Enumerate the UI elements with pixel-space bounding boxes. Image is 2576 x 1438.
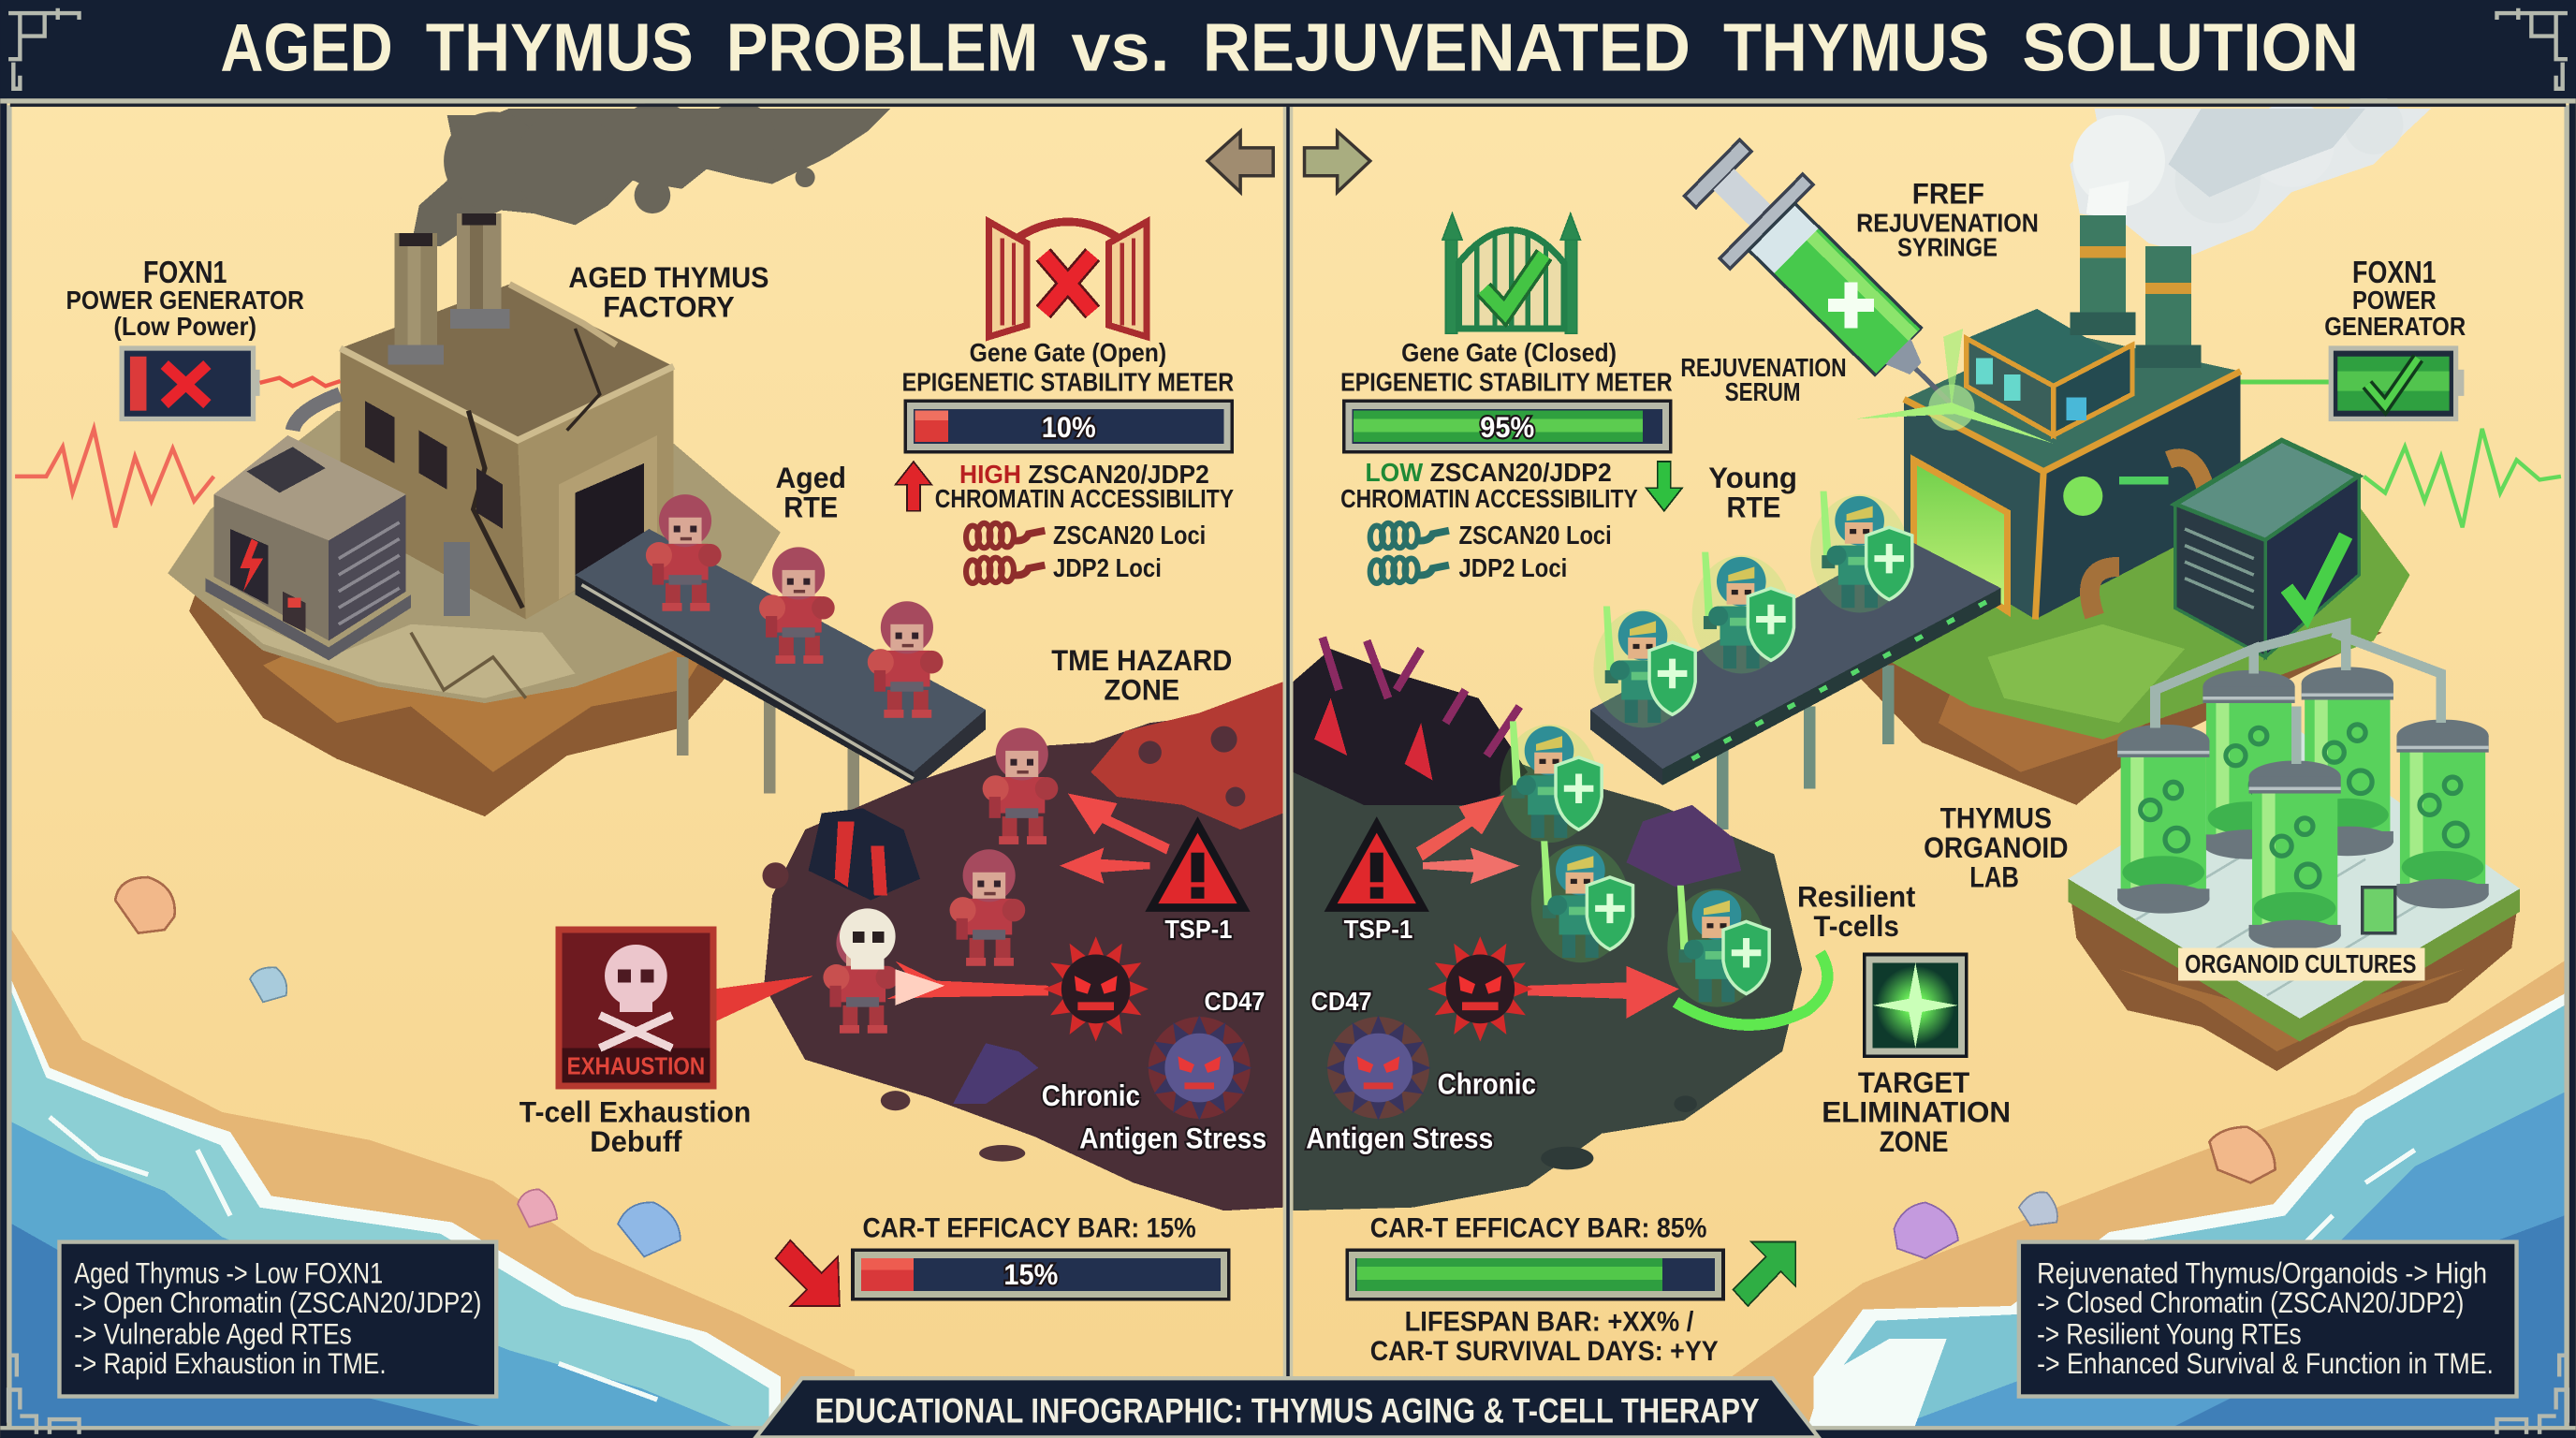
label: loci left — [1053, 521, 1206, 582]
label: gene gate and meter title left: Gene Gate (Open) — [970, 338, 1166, 367]
centre divider — [1283, 107, 1293, 1380]
label: chromatin right: LOW ZSCAN20/JDP2 — [1365, 458, 1612, 487]
label: lifespan and survival: LIFESPAN BAR: +XX% / — [1405, 1306, 1693, 1337]
label: FOXN1 right: POWER — [2352, 286, 2437, 315]
labels: right panel — [1306, 177, 2466, 1367]
summary box right: -> Resilient Young RTEs — [2037, 1316, 2302, 1350]
label: target elimination zone: ZONE — [1880, 1124, 1948, 1158]
TSP-1 warning left — [1145, 816, 1251, 912]
label: target elimination zone: TARGET — [1858, 1065, 1969, 1099]
label: FOXN1 right: GENERATOR — [2324, 312, 2466, 341]
epigenetic meter right — [1344, 401, 1671, 452]
summary box left: -> Open Chromatin (ZSCAN20/JDP2) — [74, 1285, 481, 1319]
right conveyor — [1590, 539, 2001, 829]
title banner — [0, 0, 2576, 107]
organoid lab platform — [2068, 731, 2520, 1071]
label: CD47 left: CD47 — [1205, 987, 1265, 1016]
label: FREF syringe: FREF — [1912, 177, 1984, 211]
label: chromatin left — [935, 460, 1234, 513]
epigenetic meter left: 10% — [1042, 410, 1096, 444]
label: lifespan and survival — [1370, 1306, 1719, 1367]
label: loci left: JDP2 Loci — [1053, 553, 1162, 582]
label: gene gate and meter title left: EPIGENETIC STABILITY METER — [902, 368, 1234, 397]
steam cloud — [2070, 95, 2431, 255]
direction arrow right — [1305, 131, 1370, 192]
title — [220, 10, 2359, 85]
label: FREF syringe: REJUVENATION — [1856, 208, 2039, 237]
resilient aura ring — [1676, 953, 1827, 1025]
target elimination icon — [1865, 954, 1967, 1056]
label: CD47 right: CD47 — [1311, 987, 1371, 1016]
label: young RTE: Young — [1708, 461, 1797, 494]
epigenetic meter right: 95% — [1480, 410, 1534, 444]
panel: problem side (aged thymus) — [12, 102, 1283, 1430]
organoid cultures label: ORGANOID CULTURES — [2185, 949, 2416, 978]
label: chronic antigen stress left: Antigen Stress — [1079, 1122, 1266, 1155]
hazard zone left — [762, 682, 1283, 1211]
label: rejuvenation serum — [1680, 353, 1847, 406]
rejuvenated island — [1840, 492, 2409, 805]
aged factory island — [168, 411, 781, 816]
label: loci right: JDP2 Loci — [1458, 553, 1567, 582]
chimneys — [388, 213, 509, 365]
labels: left panel — [66, 256, 1266, 1243]
right ECG wave — [2364, 429, 2561, 527]
summary box right: -> Closed Chromatin (ZSCAN20/JDP2) — [2037, 1285, 2464, 1319]
gene gate closed — [1442, 213, 1580, 333]
label: loci right: ZSCAN20 Loci — [1458, 521, 1612, 550]
hazard zone right — [1293, 638, 1802, 1211]
label: TME hazard zone: TME HAZARD — [1051, 643, 1232, 677]
label: loci left: ZSCAN20 Loci — [1053, 521, 1206, 550]
label: FREF syringe — [1856, 177, 2039, 262]
panel: solution side (rejuvenated thymus) — [1293, 95, 2564, 1430]
label: gene gate and meter title left — [902, 338, 1234, 397]
label: chronic antigen stress right: Chronic — [1438, 1067, 1536, 1101]
rope loci left — [966, 523, 1045, 583]
injection glow — [1856, 329, 2054, 444]
hazard beams left — [887, 794, 1170, 1005]
summary box left: -> Vulnerable Aged RTEs — [74, 1316, 352, 1350]
direction arrow left — [1208, 131, 1273, 192]
high chromatin arrow — [896, 462, 931, 511]
label: chronic antigen stress right — [1306, 1067, 1536, 1155]
label: young RTE — [1708, 461, 1797, 524]
label: gene gate and meter title right — [1340, 338, 1673, 397]
label: thymus organoid lab: LAB — [1969, 860, 2019, 894]
rejuvenated factory — [1904, 215, 2241, 620]
CAR-T bar left: 15% — [1003, 1257, 1058, 1291]
label: exhaustion debuff — [520, 1094, 751, 1158]
down arrow red — [776, 1240, 840, 1306]
left ECG wave — [15, 429, 213, 527]
rope loci right — [1370, 523, 1449, 583]
aged generator — [206, 435, 411, 660]
label: thymus organoid lab — [1924, 800, 2068, 894]
label: TSP-1 left: TSP-1 — [1164, 915, 1232, 944]
exhaustion debuff badge — [555, 927, 813, 1089]
label: chronic antigen stress left: Chronic — [1042, 1078, 1140, 1112]
label: target elimination zone: ELIMINATION — [1822, 1094, 2011, 1128]
summary box left: -> Rapid Exhaustion in TME. — [74, 1346, 387, 1380]
label: CAR-T efficacy left: CAR-T EFFICACY BAR: 15% — [863, 1212, 1196, 1243]
left ocean and shoreline — [12, 930, 855, 1430]
CAR-T bar right — [1347, 1250, 1723, 1299]
label: rejuvenation serum: REJUVENATION — [1680, 353, 1847, 382]
label: exhaustion debuff: Debuff — [590, 1124, 682, 1158]
smoke cloud — [411, 102, 890, 246]
power line right — [2241, 379, 2329, 385]
label: FOXN1 left: POWER GENERATOR — [66, 286, 304, 315]
rejuvenated generator — [2175, 440, 2359, 657]
exhausted skull RTE — [823, 908, 899, 1034]
CD47 purple virus right — [1325, 1015, 1431, 1121]
up arrow green — [1734, 1242, 1795, 1306]
left conveyor — [575, 529, 986, 814]
summary box left — [59, 1242, 496, 1397]
label: aged RTE: RTE — [783, 491, 838, 524]
label: chromatin left: CHROMATIN ACCESSIBILITY — [935, 484, 1234, 513]
label: TME hazard zone: ZONE — [1104, 673, 1179, 707]
exhaustion debuff badge: EXHAUSTION — [567, 1052, 705, 1080]
CD47 purple virus left — [1147, 1015, 1251, 1121]
label: resilient T-cells: T-cells — [1814, 909, 1899, 943]
left power battery — [122, 348, 341, 418]
label: thymus organoid lab: ORGANOID — [1924, 830, 2068, 864]
title: THYMUS — [1723, 10, 1989, 85]
label: aged thymus factory — [568, 260, 769, 324]
label: CAR-T efficacy right: CAR-T EFFICACY BAR: 85% — [1370, 1212, 1706, 1243]
summary box right: -> Enhanced Survival & Function in TME. — [2037, 1346, 2494, 1380]
gene gate open — [989, 222, 1147, 337]
label: gene gate and meter title right: EPIGENETIC STABILITY METER — [1340, 368, 1673, 397]
title: THYMUS — [426, 10, 694, 85]
label: chronic antigen stress right: Antigen Stress — [1306, 1122, 1493, 1155]
title: SOLUTION — [2022, 10, 2359, 85]
title: vs. — [1071, 10, 1170, 85]
serum syringe — [1671, 125, 1996, 448]
right power battery — [2331, 348, 2464, 418]
label: FREF syringe: SYRINGE — [1897, 233, 1998, 262]
hazard beams right — [1416, 795, 1679, 1019]
low chromatin arrow — [1647, 462, 1682, 511]
organoid tanks — [2117, 624, 2489, 949]
label: target elimination zone — [1822, 1065, 2011, 1158]
summary box right: Rejuvenated Thymus/Organoids -> High — [2037, 1255, 2487, 1289]
label: FOXN1 right: FOXN1 — [2352, 256, 2437, 290]
label: aged RTE: Aged — [776, 461, 846, 494]
title: AGED — [220, 10, 393, 85]
label: resilient T-cells: Resilient — [1797, 880, 1916, 914]
label: aged thymus factory: FACTORY — [603, 290, 735, 324]
label: chromatin right: CHROMATIN ACCESSIBILITY — [1340, 484, 1638, 513]
label: gene gate and meter title right: Gene Gate (Closed) — [1401, 338, 1617, 367]
green chimneys — [2070, 215, 2202, 368]
label: rejuvenation serum: SERUM — [1725, 377, 1800, 406]
TSP-1 warning right — [1325, 816, 1429, 912]
shells left — [115, 877, 681, 1256]
title: REJUVENATED — [1203, 10, 1690, 85]
label: FOXN1 left: (Low Power) — [113, 312, 256, 341]
label: aged thymus factory: AGED THYMUS — [568, 260, 769, 294]
aged RTE soldiers — [646, 494, 1058, 966]
young RTE soldiers — [1500, 492, 1912, 1007]
summary box right — [2019, 1242, 2517, 1397]
label: exhaustion debuff: T-cell Exhaustion — [520, 1094, 751, 1128]
summary box left: Aged Thymus -> Low FOXN1 — [74, 1255, 383, 1289]
label: TSP-1 right: TSP-1 — [1344, 915, 1412, 944]
title: PROBLEM — [726, 10, 1038, 85]
epigenetic meter left — [905, 401, 1232, 452]
CAR-T bar left — [853, 1250, 1229, 1299]
label: thymus organoid lab: THYMUS — [1940, 800, 2052, 834]
label: FOXN1 left: FOXN1 — [143, 256, 227, 290]
red antigen virus left — [1044, 936, 1149, 1041]
shells right — [1894, 1127, 2276, 1258]
label: TME hazard zone — [1051, 643, 1232, 707]
label: resilient T-cells — [1797, 880, 1916, 943]
label: young RTE: RTE — [1727, 491, 1780, 524]
red antigen virus right — [1427, 936, 1532, 1041]
label: aged RTE — [776, 461, 846, 524]
label: loci right — [1458, 521, 1612, 582]
label: chromatin right — [1340, 458, 1638, 513]
label: FOXN1 right — [2324, 256, 2466, 341]
label: FOXN1 left — [66, 256, 304, 341]
footer banner: EDUCATIONAL INFOGRAPHIC: THYMUS AGING & T-CELL THERAPY — [815, 1392, 1760, 1431]
label: chronic antigen stress left — [1042, 1078, 1266, 1155]
label: lifespan and survival: CAR-T SURVIVAL DAYS: +YY — [1370, 1336, 1719, 1367]
aged factory building — [293, 213, 674, 620]
label: chromatin left: HIGH ZSCAN20/JDP2 — [959, 460, 1209, 489]
footer banner — [755, 1378, 1819, 1437]
right ocean and shoreline — [1732, 961, 2564, 1430]
